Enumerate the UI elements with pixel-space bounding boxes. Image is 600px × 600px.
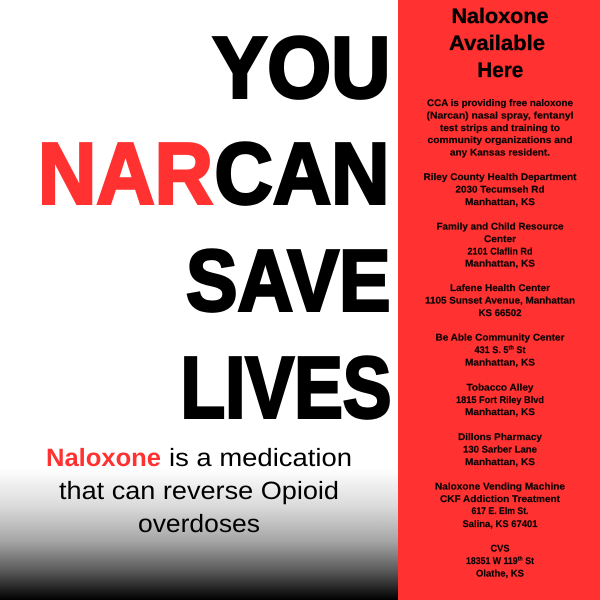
location: CVS: 18351 W 119: [466, 556, 523, 567]
location: Family and Child Resource Center: [436, 222, 564, 270]
location: Family and Child Resource Center: Center: [484, 234, 516, 245]
location: Lafene Health Center: Lafene Health Center: [450, 283, 550, 294]
location: Naloxone Vending Machine: [435, 482, 565, 530]
location: Tobacco Alley: Manhattan, KS: [465, 407, 536, 418]
location: Be Able Community Center: [436, 333, 565, 368]
location: CVS: th: [518, 556, 523, 562]
text block: naloxone description: is a medication: [169, 444, 352, 472]
text block: CCA program intro: (Narcan) nasal spray, fentanyl: [426, 110, 574, 121]
location: Lafene Health Center: [425, 283, 575, 319]
panel: left background with bottom gradient: [0, 0, 398, 600]
text block: naloxone description: that can reverse Opioid: [59, 477, 339, 505]
location: Be Able Community Center: th: [508, 344, 514, 352]
text block: naloxone description: Naloxone: [46, 444, 161, 472]
location: Naloxone Vending Machine: CKF Addiction Treatment: [440, 494, 561, 505]
location: Dillons Pharmacy: Manhattan, KS: [465, 457, 536, 468]
location: Naloxone Vending Machine: Salina, KS 67401: [462, 519, 538, 530]
location: Family and Child Resource Center: Family and Child Resource: [436, 222, 564, 232]
text block: CCA program intro: test strips and training to: [440, 123, 560, 134]
location: Riley County Health Department: Riley County Health Department: [424, 172, 577, 183]
text block: CCA program intro: CCA is providing free naloxone: [427, 98, 573, 109]
title line: SAVE: SAVE: [186, 232, 390, 330]
location: Tobacco Alley: 1815 Fort Riley Blvd: [456, 395, 544, 406]
location: Family and Child Resource Center: 2101 Claflin Rd: [468, 246, 533, 258]
location: Dillons Pharmacy: 130 Sarber Lane: [463, 444, 537, 456]
heading: Naloxone Available Here: Available: [449, 32, 545, 55]
title line: YOU: YOU: [212, 20, 390, 116]
location: Lafene Health Center: KS 66502: [478, 308, 522, 319]
panel: red locations sidebar: [398, 0, 600, 600]
location: Be Able Community Center: St: [514, 345, 526, 356]
location: Dillons Pharmacy: [458, 432, 543, 468]
location: Tobacco Alley: [456, 382, 544, 418]
text block: naloxone description: overdoses: [138, 510, 260, 538]
location: CVS: [466, 544, 535, 580]
location: Be Able Community Center: Manhattan, KS: [465, 358, 536, 368]
location: Family and Child Resource Center: Manhattan, KS: [465, 258, 536, 270]
title line: LIVES: LIVES: [180, 340, 392, 436]
heading: Naloxone Available Here: [449, 5, 548, 82]
location: Lafene Health Center: 1105 Sunset Avenue, Manhattan: [425, 296, 575, 306]
title word: NAR in red: NAR: [38, 126, 213, 222]
location: Be Able Community Center: 431 S. 5: [474, 345, 510, 356]
text block: CCA program intro: [426, 98, 574, 159]
text block: CCA program intro: community organizations and: [428, 135, 573, 146]
title word: CAN: CAN: [214, 126, 390, 222]
location: Dillons Pharmacy: Dillons Pharmacy: [458, 432, 543, 443]
heading: Naloxone Available Here: Here: [477, 59, 523, 82]
title: You Narcan Save Lives: [38, 20, 392, 436]
location: Tobacco Alley: Tobacco Alley: [466, 382, 534, 394]
location: Be Able Community Center: Be Able Community Center: [436, 333, 565, 344]
location: CVS: St: [523, 556, 535, 567]
location: Riley County Health Department: [424, 172, 577, 208]
text block: CCA program intro: any Kansas resident.: [450, 148, 550, 159]
heading: Naloxone Available Here: Naloxone: [452, 5, 548, 28]
text block: naloxone description: [46, 444, 352, 538]
location: CVS: Olathe, KS: [476, 568, 525, 580]
title line: NARCAN: [38, 126, 390, 222]
location: Naloxone Vending Machine: Naloxone Vending Machine: [435, 482, 565, 492]
location: CVS: CVS: [490, 544, 510, 554]
location: Riley County Health Department: 2030 Tecumseh Rd: [456, 184, 545, 196]
location: Naloxone Vending Machine: 617 E. Elm St.: [472, 506, 528, 517]
location: Riley County Health Department: Manhattan, KS: [465, 197, 536, 208]
